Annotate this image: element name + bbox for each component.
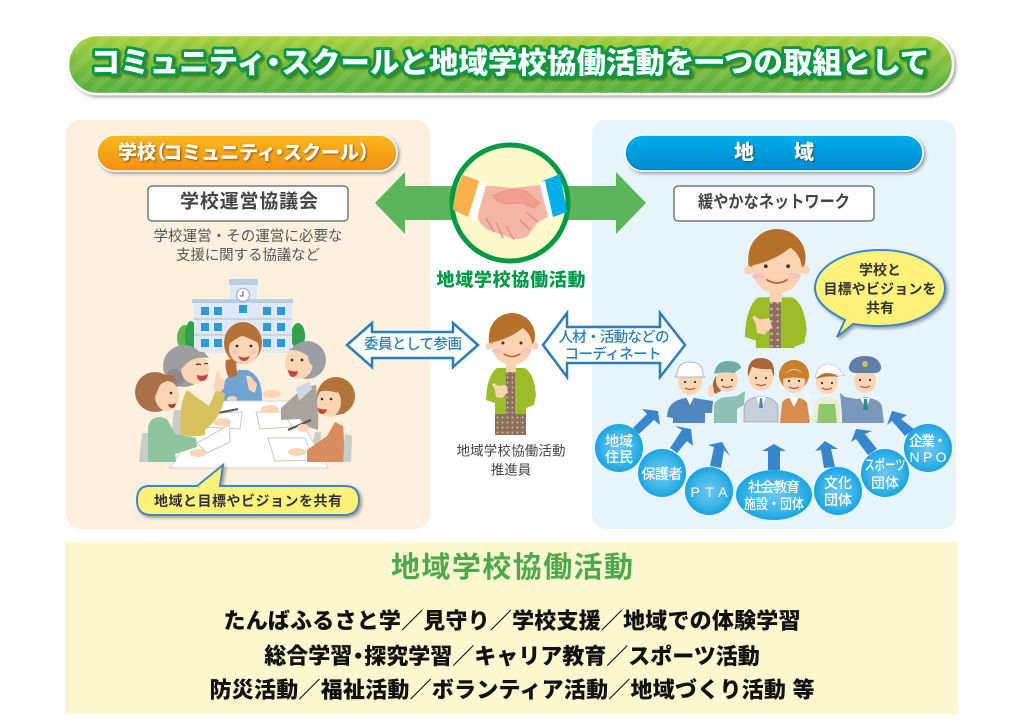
- person: community coordinator: [744, 229, 810, 355]
- illustration: community members: [667, 356, 884, 423]
- person: site worker: [667, 362, 713, 423]
- arrow: participate as committee member: [347, 323, 478, 367]
- school council description: 学校運営・その運営に必要な: [154, 228, 342, 245]
- panel: school: [66, 120, 430, 529]
- circle: PTA: PTA: [690, 484, 728, 500]
- callout: shared goals with school: [815, 250, 945, 337]
- person: woman at back: [221, 322, 262, 402]
- school heading pill: [97, 135, 397, 171]
- person: shop clerk: [779, 360, 811, 423]
- circle: local residents: 地域: [605, 433, 633, 449]
- arrow: coordinate people and activities: コーディネート: [564, 345, 662, 363]
- arrow: coordinate people and activities: 人材・活動などの: [558, 329, 670, 346]
- loose network box: [674, 186, 874, 221]
- label: community-school collaboration: 地域学校協働活動: [436, 269, 586, 290]
- circle: sports groups: 団体: [871, 475, 899, 491]
- activities list: 防災活動／福祉活動／ボランティア活動／地域づくり活動 等: [210, 678, 814, 702]
- circle: social education facilities and groups: 社会教育: [748, 479, 800, 495]
- label: collaboration promoter: 地域学校協働活動: [456, 444, 566, 458]
- label: collaboration promoter: 推進員: [491, 462, 531, 478]
- person: woman in orange: [288, 377, 355, 462]
- activities list: たんばふるさと学／見守り／学校支援／地域での体験学習: [224, 608, 800, 634]
- activities list: [210, 608, 814, 702]
- person: man in green: [135, 372, 230, 462]
- title banner: [68, 35, 953, 94]
- chairs: [139, 410, 352, 462]
- person: collaboration promoter: [486, 313, 538, 435]
- circle: sports groups: [861, 449, 909, 497]
- illustration: meeting in front of school: [135, 279, 355, 468]
- loose network box: 緩やかなネットワーク: [698, 192, 850, 212]
- callout: shared goals with community: 地域と目標やビジョンを共有: [154, 493, 342, 509]
- school council box: [148, 186, 348, 221]
- panel: collaboration activities: [65, 542, 958, 714]
- activities heading: 地域学校協働活動: [391, 551, 633, 584]
- person: grey-haired man: [261, 341, 326, 430]
- school council description: [154, 228, 342, 264]
- circle: PTA: [685, 467, 733, 515]
- label: collaboration promoter: [456, 444, 566, 478]
- callout: shared goals with community: [137, 465, 359, 515]
- circle: local residents: [595, 424, 643, 472]
- circle: cultural groups: 文化: [824, 475, 852, 491]
- circle: sports groups: スポーツ: [864, 457, 906, 473]
- green double arrow: [375, 172, 646, 234]
- table with papers: [170, 401, 328, 468]
- circle: companies and NPOs: NPO: [910, 449, 947, 465]
- circle: guardians: 保護者: [642, 466, 682, 482]
- arrow: coordinate people and activities: [543, 313, 685, 377]
- person: police officer: [840, 356, 884, 423]
- circle: companies and NPOs: [904, 424, 952, 472]
- school heading pill: 学校（コミュニティ・スクール）: [118, 140, 378, 164]
- person: man in suit: [744, 358, 778, 422]
- circle: social education facilities and groups: 施設・団体: [744, 496, 804, 512]
- person: woman in apron: [812, 364, 845, 423]
- circle: cultural groups: [814, 467, 862, 515]
- callout: shared goals with school: 学校と: [859, 262, 901, 278]
- circle: companies and NPOs: 企業・: [909, 433, 947, 449]
- callout: shared goals with school: 目標やビジョンを: [824, 281, 936, 297]
- community heading pill: 地 域: [734, 141, 814, 164]
- circle: cultural groups: 団体: [824, 492, 852, 508]
- school council box: 学校運営協議会: [180, 190, 318, 212]
- circle: guardians: [638, 449, 686, 497]
- icon: school building: [177, 279, 305, 353]
- activities list: 総合学習・探究学習／キャリア教育／スポーツ活動: [264, 644, 760, 668]
- panel: community: [592, 120, 956, 529]
- arrows from community groups to members: [633, 409, 914, 470]
- person: woman with cap: [708, 361, 745, 423]
- circle: social education facilities and groups: [736, 470, 812, 520]
- circle: local residents: 住民: [605, 449, 633, 465]
- icon: handshake: [452, 145, 568, 261]
- community heading pill: [625, 135, 923, 171]
- title text: コミュニティ・スクールと地域学校協働活動を一つの取組として: [91, 46, 929, 80]
- school council description: 支援に関する協議など: [176, 246, 320, 264]
- arrow: participate as committee member: 委員として参画: [364, 336, 462, 353]
- person: older woman: [163, 345, 231, 436]
- callout: shared goals with school: 共有: [866, 300, 894, 316]
